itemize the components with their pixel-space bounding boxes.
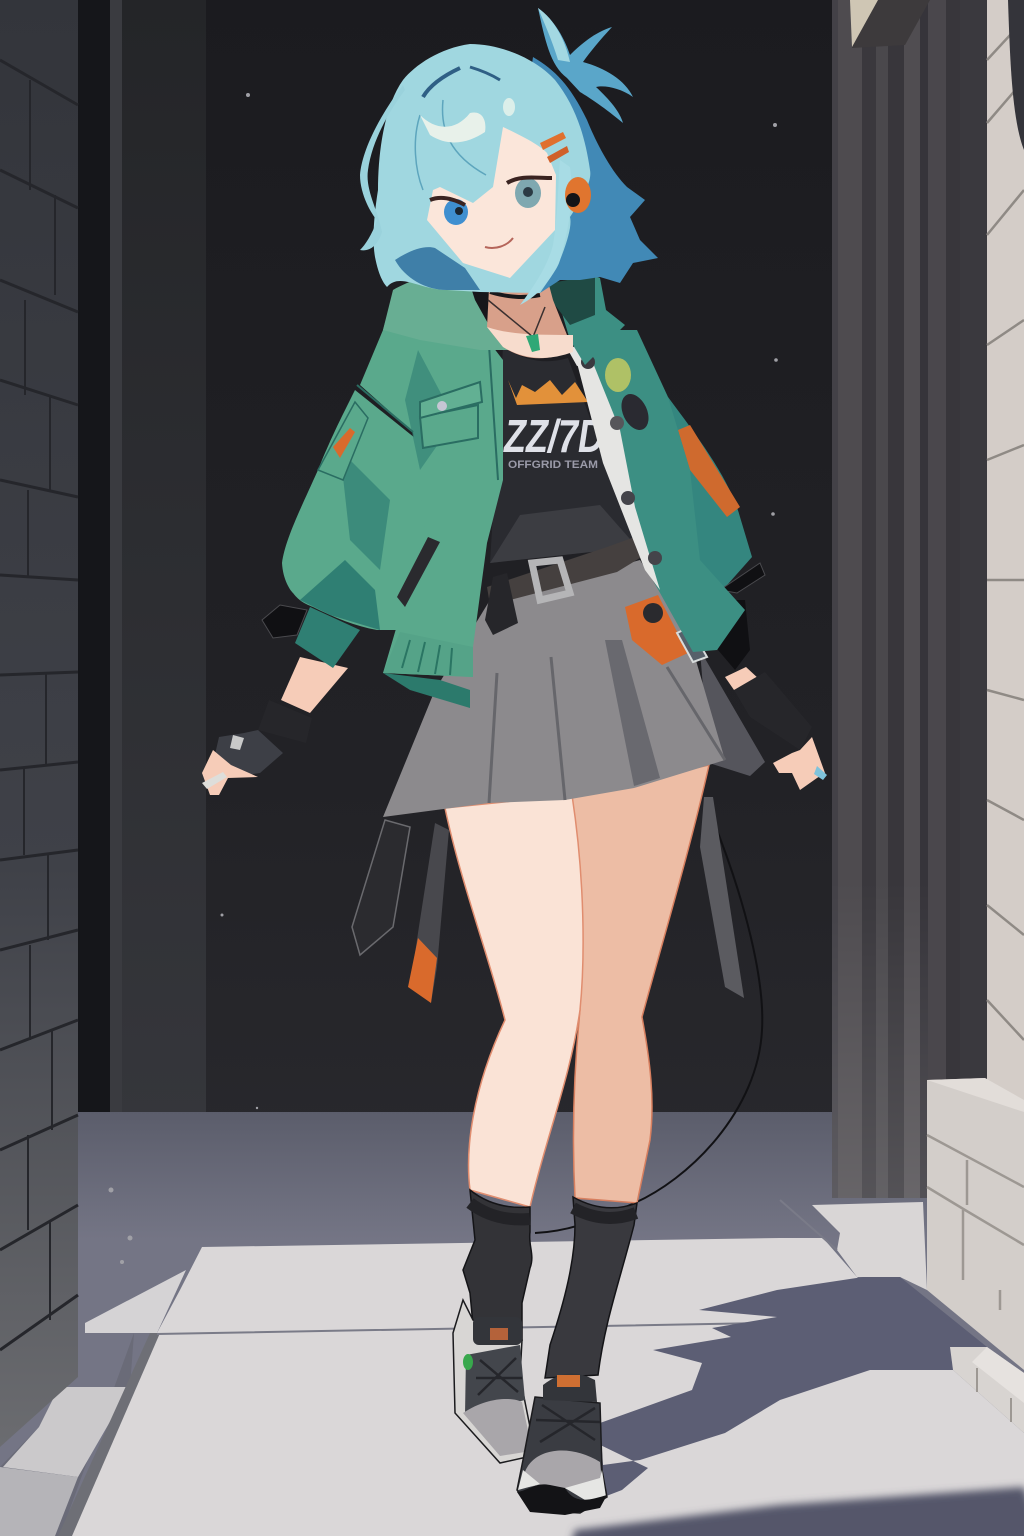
zip pocket <box>397 537 440 607</box>
front leg <box>445 795 583 1207</box>
dark pillar left <box>78 0 206 1120</box>
sleeve left <box>262 390 430 668</box>
jacket left panel <box>357 295 503 708</box>
left brick wall <box>0 0 78 1447</box>
choker and necklace <box>488 292 545 352</box>
dust specks <box>108 93 778 1264</box>
figure <box>202 8 827 1515</box>
orange pouch <box>625 595 707 665</box>
shirt graphic lettering: ZZ/7D <box>502 410 604 462</box>
left arm, wristband and glove <box>202 657 348 795</box>
floor in shadow <box>0 1112 1024 1536</box>
hair dark lower left <box>395 247 480 290</box>
shirt graphic crown <box>508 380 588 405</box>
stone ledge lower right <box>927 1078 1024 1433</box>
shoe: right <box>517 1374 607 1515</box>
shoe: left <box>453 1300 530 1463</box>
jacket right panel <box>568 330 745 652</box>
character floor shadow <box>562 1277 987 1513</box>
socks <box>463 1190 637 1378</box>
hood and collar <box>383 263 625 365</box>
earphone <box>565 177 591 213</box>
right arm, glove and hand <box>725 667 827 790</box>
shirt small print: OFFGRID TEAM <box>508 459 598 471</box>
smile <box>485 238 513 248</box>
hair clip <box>540 132 569 163</box>
hair side lock <box>520 160 572 305</box>
eyes <box>430 177 552 225</box>
bottom shadow band <box>560 1487 1024 1536</box>
skirt <box>383 560 765 817</box>
sleeve right <box>640 397 765 670</box>
neck and chest <box>487 270 573 358</box>
belt <box>485 535 648 635</box>
t-shirt <box>490 347 637 563</box>
hanging straps <box>352 797 744 1003</box>
chest pocket <box>420 382 482 448</box>
sunlit pavement <box>0 1200 1024 1536</box>
hair front crown <box>374 44 590 293</box>
hair back <box>500 57 658 293</box>
hair strands and highlight <box>415 67 515 190</box>
cable <box>535 820 762 1233</box>
face <box>427 127 556 278</box>
back leg <box>572 765 709 1203</box>
ponytail <box>538 8 633 123</box>
hair strand left <box>360 85 405 250</box>
right stone wall <box>987 0 1024 1115</box>
right fluted column <box>832 0 987 1198</box>
